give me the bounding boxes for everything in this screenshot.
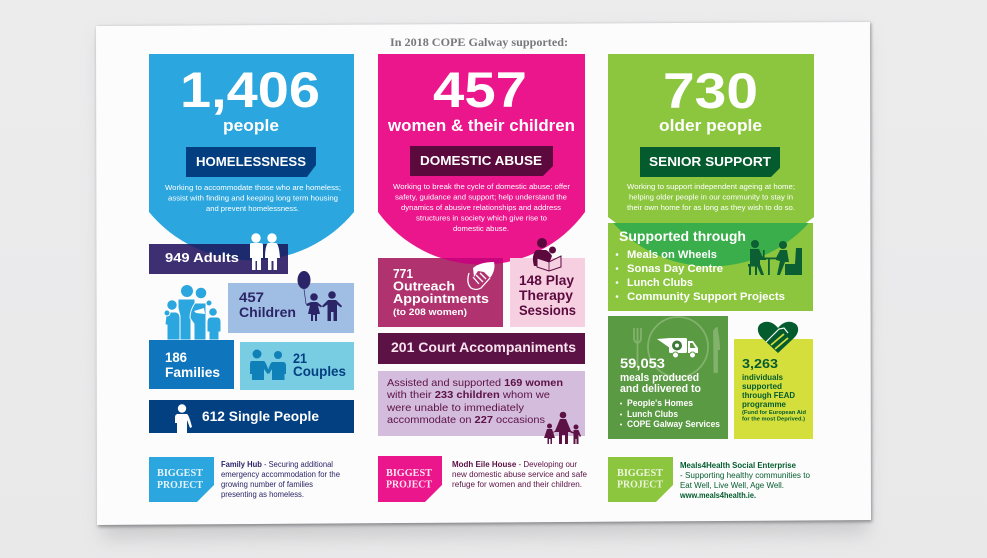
- meals4health text: - Supporting healthy communities to: [680, 471, 811, 480]
- outreach appointments box: (to 208 women): [393, 307, 467, 318]
- domestic abuse description: safety, guidance and support; help understand the: [395, 192, 567, 202]
- icon: family group: [164, 284, 221, 340]
- 949 adults bar: 949 Adults: [165, 250, 239, 265]
- assisted women box: were unable to immediately: [386, 402, 525, 414]
- icon: single person: [175, 404, 192, 434]
- domestic abuse description: dynamics of abusive relationships and address: [401, 203, 561, 212]
- play therapy box: Sessions: [519, 303, 576, 318]
- icon: adults: [250, 233, 280, 270]
- icon: couple: [250, 350, 286, 380]
- outreach appointments box: [378, 258, 503, 327]
- assisted women box: accommodate on 227 occasions: [387, 414, 545, 426]
- big number 457: 457: [433, 62, 527, 118]
- 949 adults bar: [149, 244, 288, 274]
- biggest project tag: PROJECT: [157, 480, 203, 491]
- senior support description: [627, 182, 795, 212]
- senior support description: helping older people in our community to stay in: [629, 192, 793, 202]
- meals produced box: People's Homes: [627, 398, 693, 408]
- icon: helping hand: [468, 262, 494, 290]
- senior support shield: [608, 54, 814, 223]
- family hub text: emergency accommodation for the: [221, 470, 340, 479]
- panel: domestic abuse column: [378, 54, 587, 502]
- domestic abuse description: structures in society which give rise to: [416, 214, 547, 222]
- older people label: older people: [659, 116, 762, 135]
- court accompaniments bar: 201 Court Accompaniments: [391, 340, 576, 355]
- play therapy box: 148 Play: [519, 273, 574, 288]
- family hub text: growing number of families: [221, 480, 313, 489]
- big number 730: 730: [663, 63, 758, 119]
- 21 couples box: Couples: [293, 364, 346, 379]
- senior support banner: SENIOR SUPPORT: [649, 154, 771, 169]
- 612 single people bar: 612 Single People: [202, 409, 320, 424]
- homelessness description: [165, 183, 341, 213]
- modh eile house text: new domestic abuse service and safe: [452, 470, 587, 479]
- biggest project tag: [608, 457, 673, 502]
- supported through box: Lunch Clubs: [627, 277, 693, 289]
- biggest project tag: BIGGEST: [157, 468, 203, 479]
- icon: children with balloon: [298, 271, 342, 321]
- domestic abuse banner: DOMESTIC ABUSE: [420, 153, 542, 168]
- senior support description: Working to support independent ageing at home;: [627, 182, 795, 191]
- family hub text: presenting as homeless.: [221, 490, 304, 499]
- meals produced box: 59,053: [620, 355, 665, 371]
- 186 families box: 186: [165, 350, 187, 365]
- women and children label: women & their children: [387, 116, 575, 135]
- meals4health text: Eat Well, Live Well, Age Well.: [680, 481, 784, 490]
- modh eile house text: [452, 460, 587, 489]
- homelessness shield: [149, 54, 354, 260]
- 186 families box: [149, 340, 234, 389]
- senior support description: their own home for as long as they wish to do so.: [627, 203, 795, 212]
- meals produced box: COPE Galway Services: [627, 419, 720, 429]
- supported through box: Community Support Projects: [627, 291, 785, 303]
- biggest project tag: BIGGEST: [386, 468, 432, 479]
- icon: heart hands: [758, 322, 798, 353]
- family hub text: Family Hub - Securing additional: [221, 460, 333, 469]
- outreach appointments box: Appointments: [393, 291, 489, 306]
- biggest project tag: [149, 457, 214, 502]
- 457 children box: Children: [239, 305, 296, 320]
- FEAD box: for the most Deprived.): [742, 416, 805, 422]
- icon: delivery truck: [657, 338, 698, 358]
- meals produced box: meals produced: [620, 372, 699, 384]
- assisted women box: [378, 371, 585, 436]
- icon: mother and children: [544, 412, 581, 444]
- FEAD box: individuals: [742, 373, 783, 382]
- supported through box: Sonas Day Centre: [627, 263, 723, 275]
- assisted women box: with their 233 children whom we: [386, 389, 550, 401]
- biggest project tag: PROJECT: [617, 480, 663, 490]
- homelessness banner: [186, 147, 316, 177]
- people label: people: [223, 116, 279, 135]
- play therapy box: Therapy: [519, 288, 573, 303]
- meals4health text: [679, 461, 811, 500]
- biggest project tag: PROJECT: [386, 480, 432, 490]
- senior support banner: [640, 147, 780, 177]
- FEAD box: programme: [742, 400, 786, 409]
- domestic abuse shield: [378, 54, 585, 265]
- modh eile house text: refuge for women and their children.: [452, 480, 582, 489]
- domestic abuse banner: [410, 146, 553, 176]
- supported through box: Supported through: [619, 228, 746, 244]
- biggest project tag: [378, 456, 442, 502]
- meals4health text: Meals4Health Social Enterprise: [680, 461, 797, 470]
- supported through box: [608, 223, 813, 311]
- court accompaniments bar: [378, 333, 585, 364]
- 186 families box: Families: [165, 365, 220, 380]
- domestic abuse description: Working to break the cycle of domestic abuse; offer: [393, 182, 570, 191]
- outreach appointments box: 771: [393, 266, 413, 281]
- panel: homelessness column: [149, 54, 354, 502]
- homelessness description: and prevent homelessness.: [206, 204, 299, 213]
- 21 couples box: 21: [293, 351, 307, 366]
- meals produced box: [608, 316, 728, 439]
- homelessness description: Working to accommodate those who are homeless;: [165, 183, 341, 192]
- paper sheet: [96, 22, 872, 539]
- icon: plate and cutlery: [634, 317, 720, 377]
- FEAD box: through FEAD: [742, 391, 795, 400]
- domestic abuse description: [393, 182, 570, 233]
- icon: people at table: [748, 240, 802, 275]
- modh eile house text: Modh Eile House - Developing our: [452, 460, 577, 469]
- icon: reading child: [533, 238, 561, 271]
- 21 couples box: [240, 342, 354, 390]
- FEAD box: 3,263: [742, 356, 778, 371]
- meals4health text: www.meals4health.ie.: [679, 491, 756, 500]
- outreach appointments box: Outreach: [393, 278, 455, 294]
- meals produced box: and delivered to: [620, 383, 701, 395]
- homelessness description: assist with finding and keeping long term housing: [168, 194, 338, 202]
- family hub text: [221, 460, 340, 499]
- 457 children box: 457: [239, 290, 264, 305]
- 457 children box: [228, 283, 354, 333]
- homelessness banner: HOMELESSNESS: [196, 154, 306, 169]
- panel: senior support column: [608, 54, 814, 502]
- play therapy box: [510, 258, 585, 327]
- 612 single people bar: [149, 400, 354, 433]
- FEAD box: [734, 339, 813, 439]
- FEAD box: supported: [742, 382, 782, 391]
- supported through box: Meals on Wheels: [627, 249, 717, 261]
- domestic abuse description: domestic abuse.: [453, 224, 509, 233]
- FEAD box: (Fund for European Aid: [742, 410, 806, 416]
- meals produced box: Lunch Clubs: [627, 409, 678, 419]
- assisted women box: Assisted and supported 169 women: [387, 377, 563, 389]
- big number 1,406: 1,406: [180, 62, 320, 118]
- title: In 2018 COPE Galway supported:: [390, 37, 568, 49]
- biggest project tag: BIGGEST: [617, 468, 663, 479]
